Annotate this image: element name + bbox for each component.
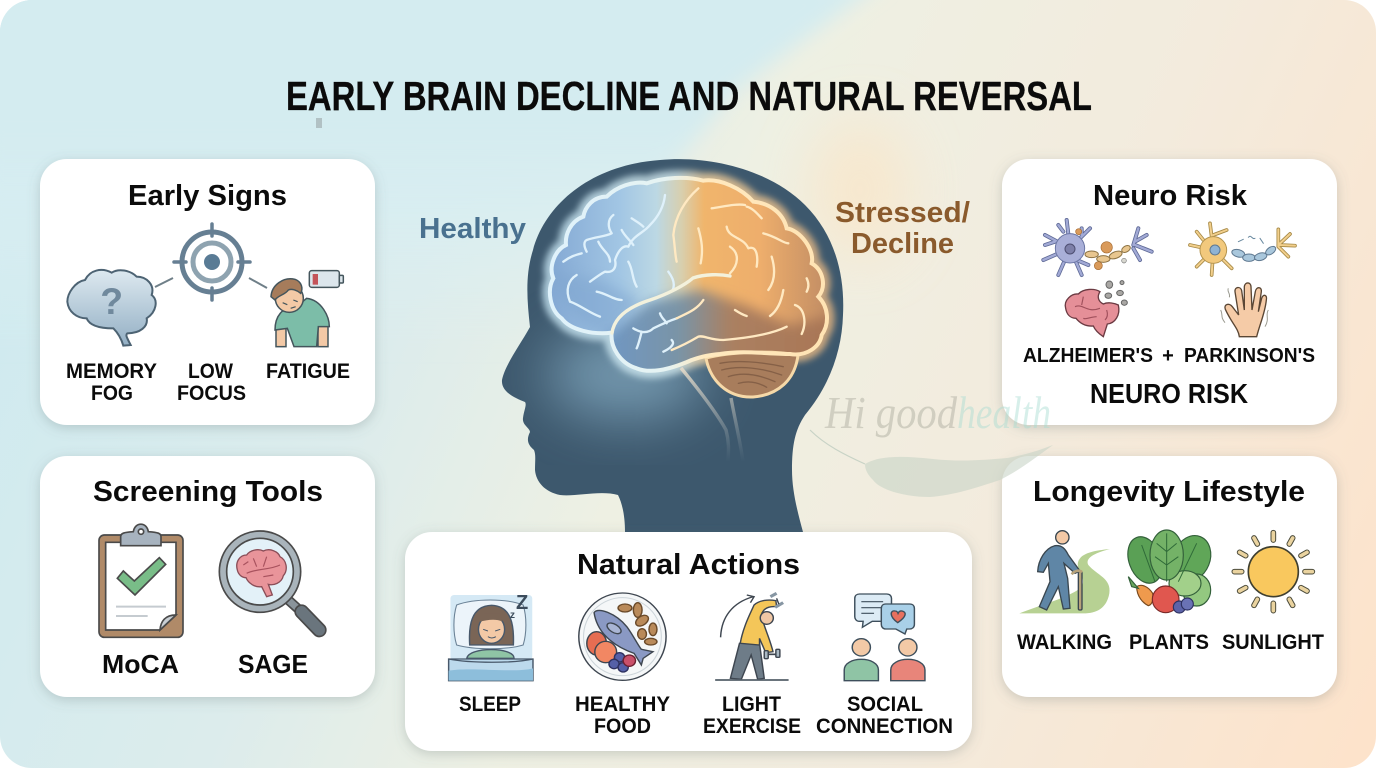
icon: damaged neuron yellow xyxy=(1190,223,1295,275)
label: sunlight: SUNLIGHT xyxy=(1222,631,1324,654)
label: stressed / decline: Decline xyxy=(851,228,954,260)
label: social connection: CONNECTION xyxy=(816,715,953,738)
icon: sleep z letters xyxy=(510,592,528,621)
title: EARLY BRAIN DECLINE AND NATURAL REVERSAL xyxy=(286,73,1092,119)
label: memory fog xyxy=(66,360,157,405)
heading: screening tools: Screening Tools xyxy=(93,476,323,508)
icon: magnifier over brain xyxy=(219,531,319,630)
icon: damaged neuron purple xyxy=(1043,220,1152,275)
label: social connection xyxy=(816,693,953,738)
label: light exercise xyxy=(703,693,801,738)
panel: neuro risk xyxy=(1002,159,1337,425)
connector lines xyxy=(155,278,267,288)
label: alzheimer's + parkinson's: + xyxy=(1162,345,1174,367)
label: sage: SAGE xyxy=(238,649,308,679)
brain xyxy=(552,180,825,369)
cerebellum xyxy=(706,352,798,397)
icon: sleep z letters: z xyxy=(510,610,515,621)
label: stressed / decline: Stressed/ xyxy=(835,197,970,229)
icon: walking with cane xyxy=(1019,531,1110,613)
label: light exercise: LIGHT xyxy=(722,693,781,716)
label: sleep: SLEEP xyxy=(459,693,521,716)
label: healthy: Healthy xyxy=(419,213,526,245)
label: low focus xyxy=(177,360,246,405)
icon: healthy food plate xyxy=(579,593,666,680)
watermark: hi good health xyxy=(810,387,1053,497)
icon: memory fog cloud brain: ? xyxy=(100,280,123,322)
icon: brain crumbling xyxy=(1065,281,1127,337)
feather xyxy=(865,445,1053,497)
brain folds left xyxy=(563,195,677,352)
label: walking: WALKING xyxy=(1017,631,1112,654)
brain folds right xyxy=(672,188,808,350)
panel: early signs xyxy=(40,159,375,425)
label: alzheimer's + parkinson's: ALZHEIMER'S xyxy=(1023,345,1153,367)
label: low focus: FOCUS xyxy=(177,382,246,405)
icon: memory fog cloud brain xyxy=(67,270,156,346)
icon: fatigue person with low battery xyxy=(271,271,343,347)
label: healthy food xyxy=(575,693,670,738)
icon: low focus target xyxy=(174,224,250,300)
central head and brain illustration xyxy=(502,159,843,532)
head silhouette xyxy=(502,159,843,532)
label: social connection: SOCIAL xyxy=(847,693,923,716)
icon: plants xyxy=(1122,530,1217,613)
label: healthy food: FOOD xyxy=(594,715,651,738)
central fold and temporal lobe outline xyxy=(612,275,730,333)
label: memory fog: FOG xyxy=(91,382,133,405)
label: fatigue: FATIGUE xyxy=(266,360,350,383)
heading: neuro risk: Neuro Risk xyxy=(1093,180,1248,212)
watermark: hi good health: Hi good xyxy=(824,387,958,438)
label: alzheimer's + parkinson's xyxy=(1023,345,1315,367)
panel: screening tools xyxy=(40,456,375,697)
label: alzheimer's + parkinson's: PARKINSON'S xyxy=(1184,345,1315,367)
icon: sun xyxy=(1234,533,1312,611)
icon: sleep z letters: Z xyxy=(516,592,528,614)
head glow xyxy=(545,178,827,420)
label: healthy food: HEALTHY xyxy=(575,693,670,716)
label: stressed / decline xyxy=(835,197,970,260)
label: low focus: LOW xyxy=(188,360,233,383)
heading: natural actions: Natural Actions xyxy=(577,549,800,581)
watermark: hi good health: health xyxy=(957,387,1051,438)
icon: sleep xyxy=(449,595,533,681)
label: memory fog: MEMORY xyxy=(66,360,157,383)
icon: light exercise xyxy=(715,593,789,680)
label: neuro risk: NEURO RISK xyxy=(1090,378,1248,409)
heading: early signs: Early Signs xyxy=(128,180,287,212)
label: moca: MoCA xyxy=(102,649,179,679)
icon: clipboard with check xyxy=(99,524,183,637)
icon: tremor hand xyxy=(1221,283,1268,337)
brain stem xyxy=(681,368,743,462)
brain outline xyxy=(550,178,827,371)
label: light exercise: EXERCISE xyxy=(703,715,801,738)
heading: longevity lifestyle: Longevity Lifestyle xyxy=(1033,476,1305,508)
panel: natural actions xyxy=(405,532,972,751)
label: plants: PLANTS xyxy=(1129,631,1209,654)
icon: social connection xyxy=(844,594,925,681)
panel: longevity lifestyle xyxy=(1002,456,1337,697)
